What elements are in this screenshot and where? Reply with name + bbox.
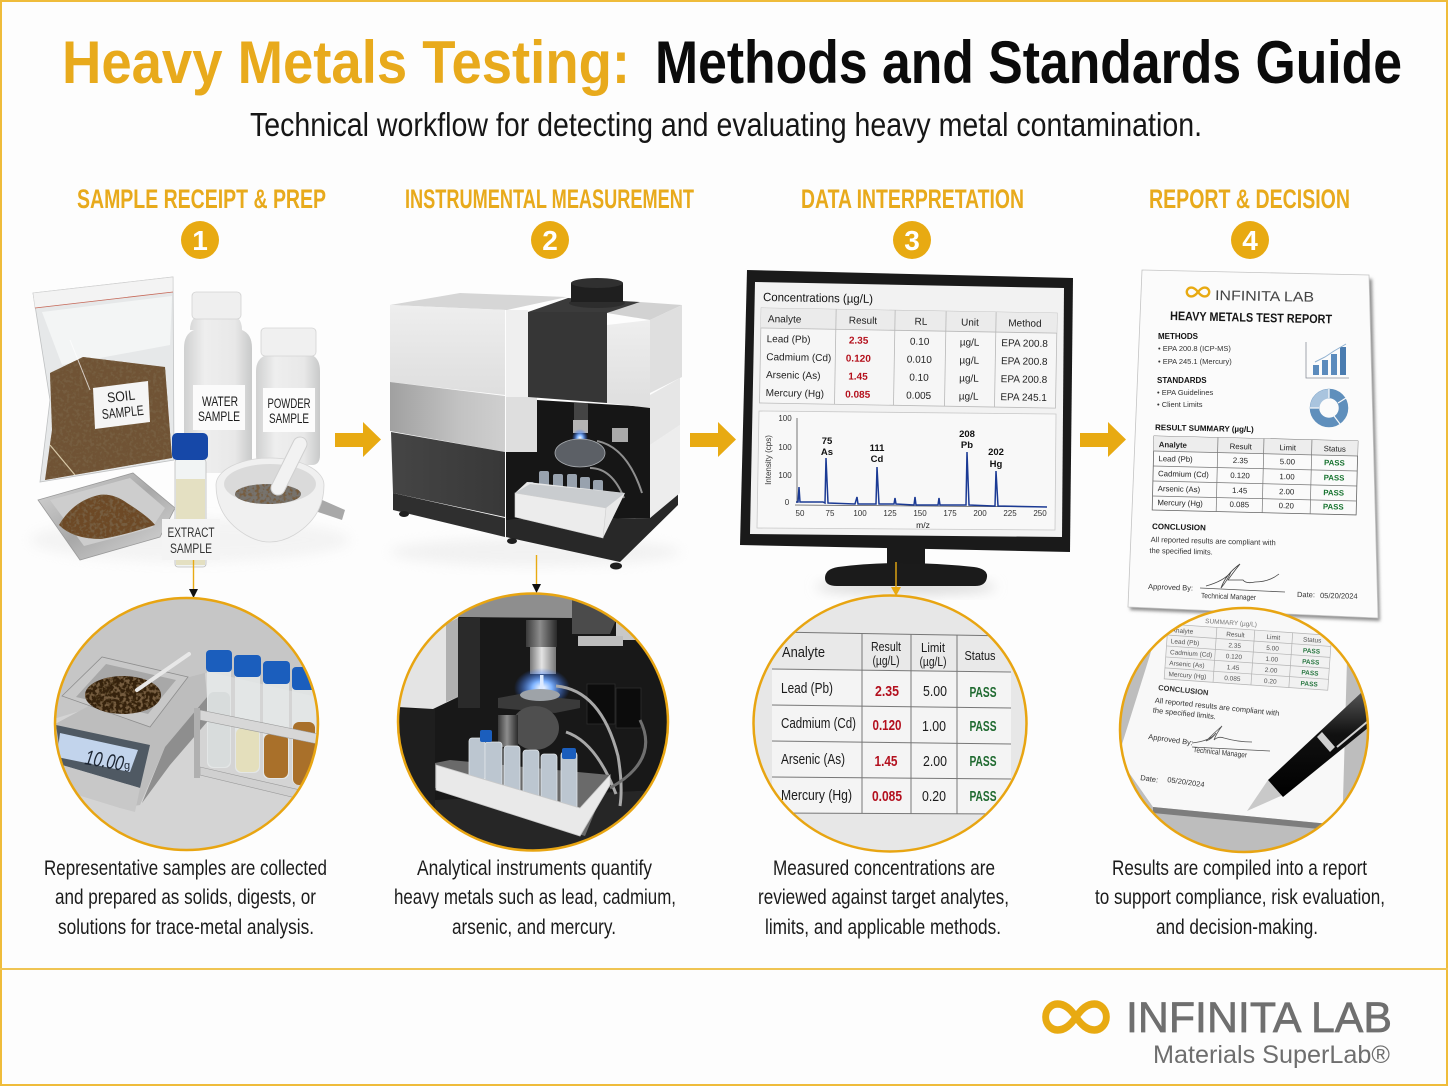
extract sample vial: SAMPLE: [170, 541, 212, 556]
powder sample bottle: SAMPLE: [269, 410, 309, 426]
soil sample bag: SOIL: [106, 387, 136, 405]
mass spectrum chart: Intensity (cps): [764, 435, 773, 485]
down arrow step 2: [532, 555, 541, 593]
methods and standards lists: [1157, 332, 1232, 409]
vial tray: [435, 730, 610, 836]
detail circle 3: limits table: 5.00: [923, 684, 947, 700]
zoomed signature: Technical Manager: [1193, 745, 1248, 760]
soil sample bag: [33, 277, 174, 482]
result summary heading: RESULT SUMMARY (µg/L): [1155, 423, 1254, 434]
concentrations table: EPA 245.1: [1000, 392, 1047, 404]
report signature block: Approved By:: [1148, 582, 1193, 593]
caption step 1: Representative samples are collected: [44, 857, 327, 880]
soil sample bag: SAMPLE: [101, 402, 144, 422]
mass spectrum chart: 225: [1003, 509, 1017, 518]
mortar and pestle: [216, 444, 345, 542]
caption step 2: [394, 857, 676, 939]
detail circle 3: limits table: 0.120: [872, 718, 902, 734]
mass spectrum chart: [757, 411, 1056, 530]
detail circle 3: limits table: 2.00: [923, 754, 947, 770]
zoomed table: Analyte: [1171, 627, 1194, 636]
concentrations table: Result: [849, 315, 877, 327]
caption step 1: solutions for trace-metal analysis.: [58, 916, 314, 939]
mass spectrum chart: 175: [943, 509, 957, 518]
mass spectrum chart: 208: [959, 429, 975, 440]
caption step 3: [758, 857, 1009, 939]
mass spectrum chart: As: [821, 447, 833, 458]
mass spectrum chart: 100: [778, 414, 792, 423]
zoomed table: Mercury (Hg): [1168, 671, 1207, 681]
detail circle 3: limits table: 0.085: [872, 789, 902, 805]
zoomed table: PASS: [1303, 647, 1321, 656]
report results table: 0.120: [1230, 471, 1251, 480]
report results table: Mercury (Hg): [1157, 498, 1203, 508]
zoomed table: Limit: [1266, 634, 1281, 642]
water sample bottle: SAMPLE: [198, 408, 240, 424]
zoomed signature: 05/20/2024: [1167, 775, 1205, 789]
report bar chart: [1306, 342, 1349, 378]
mass spectrum chart: 250: [1033, 509, 1047, 518]
zoomed summary heading: SUMMARY (µg/L): [1205, 618, 1257, 629]
report results table: 0.20: [1279, 501, 1295, 510]
water sample bottle: WATER: [202, 393, 238, 409]
report results table: Cadmium (Cd): [1158, 469, 1209, 479]
report donut chart: [1310, 389, 1346, 424]
mass spectrum chart: 100: [778, 471, 792, 480]
step badge 4: 4: [1242, 225, 1258, 256]
detail circle 3: limits table: PASS: [970, 719, 997, 735]
mass spectrum chart: Hg: [990, 459, 1003, 470]
report results table: Status: [1324, 444, 1346, 454]
mass spectrum chart: 0: [785, 498, 790, 507]
concentrations table: Mercury (Hg): [766, 388, 824, 400]
detail circle 3: limits table: PASS: [970, 789, 997, 805]
subtitle: Technical workflow for detecting and evaluating heavy metal contamination.: [250, 106, 1202, 143]
detail circle 3: limits table: Analyte: [782, 645, 825, 661]
report results table: Arsenic (As): [1158, 484, 1201, 494]
monitor stand: [816, 546, 996, 595]
concentrations table: 2.35: [849, 336, 869, 347]
report results table: 2.35: [1233, 456, 1249, 465]
concentrations table: EPA 200.8: [1001, 338, 1048, 350]
step badge 1: 1: [192, 225, 208, 256]
concentrations table: [760, 308, 1057, 408]
report results table: PASS: [1323, 502, 1344, 512]
detail circle 3: limits table: 1.00: [922, 719, 946, 735]
concentrations table: µg/L: [959, 391, 979, 403]
detail circle 3: limits table: [750, 590, 1030, 855]
illustration: ICP-MS instrument: [390, 278, 682, 570]
step badge 3: 3: [904, 225, 920, 256]
zoomed table: 1.45: [1227, 664, 1240, 672]
mass spectrum chart: 75: [822, 436, 833, 447]
concentrations table: 0.085: [845, 389, 871, 401]
report results table: Limit: [1279, 443, 1297, 452]
report results table: PASS: [1324, 473, 1344, 483]
detail circle 2: plasma torch and autosampler: [395, 590, 675, 855]
balance: g: [124, 760, 130, 772]
mass spectrum chart: m/z: [916, 520, 930, 530]
zoomed conclusion: the specified limits.: [1152, 706, 1216, 721]
zoomed table: PASS: [1302, 658, 1320, 667]
concentrations table: µg/L: [959, 355, 980, 367]
caption step 2: arsenic, and mercury.: [452, 916, 616, 939]
mass spectrum chart: 100: [778, 443, 792, 452]
step 3 heading: DATA INTERPRETATION: [801, 184, 1024, 214]
concentrations table: Analyte: [768, 314, 802, 326]
tagline: Materials SuperLab®: [1153, 1041, 1391, 1069]
step 2 heading: INSTRUMENTAL MEASUREMENT: [405, 184, 694, 214]
detail circle 3: limits table: Arsenic (As): [781, 752, 845, 768]
report results table: 2.00: [1279, 487, 1295, 496]
methods and standards lists: METHODS: [1158, 332, 1199, 341]
zoomed table: 5.00: [1266, 645, 1279, 653]
report results table: 5.00: [1280, 457, 1296, 466]
icon: infinity mark: [1046, 1004, 1106, 1030]
zoomed signature: Approved By:: [1148, 732, 1194, 747]
illustration: sample containers: [30, 277, 350, 567]
caption step 4: to support compliance, risk evaluation,: [1095, 886, 1385, 909]
detail circle 3: limits table: 2.35: [875, 684, 899, 700]
methods and standards lists: • Client Limits: [1157, 400, 1203, 409]
report conclusion: the specified limits.: [1149, 546, 1213, 557]
concentrations table: 1.45: [848, 371, 868, 383]
detail circle 3: limits table: (µg/L): [872, 654, 900, 668]
zoomed table: 0.20: [1264, 678, 1277, 686]
report results table: Analyte: [1159, 440, 1188, 450]
caption step 1: and prepared as solids, digests, or: [55, 886, 316, 909]
report signature block: Technical Manager: [1201, 591, 1257, 602]
tray of soil with spoon: [62, 654, 189, 727]
caption step 1: [44, 857, 327, 939]
step badge 2: 2: [542, 225, 558, 256]
mass spectrum chart: 200: [973, 509, 987, 518]
zoomed table: 2.35: [1228, 642, 1242, 650]
detail circle 3: limits table: PASS: [970, 754, 997, 770]
zoomed table: Result: [1226, 631, 1245, 639]
drain block: [587, 684, 641, 728]
report logo: [1187, 287, 1314, 305]
report results table: 1.45: [1232, 486, 1248, 495]
detail circle 3: limits table: Status: [964, 649, 996, 663]
zoomed table: 0.085: [1224, 675, 1241, 683]
footer logo: Infinita Lab: [1046, 994, 1392, 1069]
mass spectrum chart: 150: [913, 509, 927, 518]
concentrations table: Unit: [961, 317, 979, 329]
detail circle 3: limits table: Result: [871, 640, 901, 654]
zoomed conclusion: All reported results are compliant with: [1154, 696, 1280, 718]
zoomed table: [1164, 624, 1332, 690]
concentrations table: µg/L: [960, 337, 980, 349]
zoomed table: 1.00: [1265, 656, 1279, 664]
illustration: monitor with results: [740, 270, 1073, 595]
mass spectrum chart: 202: [988, 447, 1004, 458]
caption step 4: [1095, 857, 1385, 939]
flow arrow 2 to 3: [690, 422, 736, 457]
caption step 3: Measured concentrations are: [773, 857, 995, 880]
caption step 4: and decision-making.: [1156, 916, 1318, 939]
detail circle 3: limits table: Lead (Pb): [781, 681, 833, 697]
concentrations table: EPA 200.8: [1001, 356, 1048, 368]
detail circle 3: limits table: Mercury (Hg): [781, 788, 852, 804]
powder sample bottle: [256, 328, 320, 465]
concentrations table: 0.005: [906, 391, 932, 402]
mass spectrum chart: 100: [853, 509, 867, 518]
down arrow step 1: [189, 560, 198, 598]
caption step 2: Analytical instruments quantify: [417, 857, 652, 880]
report conclusion: CONCLUSION: [1152, 522, 1206, 532]
concentrations table: Cadmium (Cd): [766, 352, 831, 364]
zoomed signature: [1140, 726, 1270, 789]
wordmark: INFINITA LAB: [1126, 994, 1392, 1042]
mass spectrum chart: Cd: [871, 454, 884, 465]
detail circle 4: signed report with pen: [1118, 606, 1370, 854]
zoomed table: Status: [1303, 636, 1322, 645]
concentrations table: Method: [1008, 318, 1042, 330]
methods and standards lists: • EPA 245.1 (Mercury): [1158, 357, 1232, 366]
extract sample vial: [162, 433, 220, 567]
zoomed table: 2.00: [1264, 667, 1278, 675]
powder sample bottle: POWDER: [268, 395, 310, 411]
report title: HEAVY METALS TEST REPORT: [1170, 309, 1333, 326]
report results table: Lead (Pb): [1158, 454, 1193, 464]
report conclusion: All reported results are compliant with: [1151, 535, 1276, 547]
illustration: test report document: [1128, 270, 1380, 621]
report signature block: Date:: [1297, 590, 1315, 599]
step 1 heading: SAMPLE RECEIPT & PREP: [77, 184, 326, 214]
concentrations table: RL: [914, 317, 928, 328]
zoomed table: Cadmium (Cd): [1170, 649, 1212, 659]
detail circle 3: limits table: PASS: [970, 685, 997, 701]
mass spectrum chart: Pb: [961, 440, 973, 451]
caption step 3: reviewed against target analytes,: [758, 886, 1009, 909]
balance: [55, 673, 207, 812]
step badge 2: [531, 221, 569, 259]
down arrow step 3: [891, 562, 901, 596]
report results table: PASS: [1323, 488, 1344, 498]
report results table: [1152, 436, 1358, 515]
zoomed table: PASS: [1300, 680, 1319, 689]
zoomed conclusion: CONCLUSION: [1158, 683, 1209, 697]
title: Heavy Metals Testing:: [62, 29, 630, 96]
stainless tray with soil: [38, 473, 175, 560]
extract sample vial: EXTRACT: [168, 525, 214, 540]
caption step 2: heavy metals such as lead, cadmium,: [394, 886, 676, 909]
test tube rack: [194, 650, 318, 798]
report results table: 1.00: [1279, 472, 1295, 481]
zoomed signature: Date:: [1140, 773, 1159, 784]
mass spectrum chart: 111: [870, 443, 885, 454]
step 4 heading: REPORT & DECISION: [1149, 184, 1350, 214]
step badge 4: [1231, 221, 1269, 259]
concentrations table: Lead (Pb): [767, 334, 811, 346]
caption step 4: Results are compiled into a report: [1112, 857, 1367, 880]
caption step 3: limits, and applicable methods.: [765, 916, 1001, 939]
balance: 10.00: [83, 746, 126, 776]
report results table: 0.085: [1229, 500, 1250, 509]
detail circle 3: limits table: 0.20: [922, 789, 946, 805]
zoomed table: Lead (Pb): [1171, 638, 1199, 647]
detail circle 3: limits table: (µg/L): [920, 655, 946, 669]
concentrations table: µg/L: [959, 373, 979, 385]
concentrations table: 0.10: [910, 337, 930, 348]
detail circle 3: limits table: Limit: [921, 641, 945, 655]
detail circle 1: weighing and digests: [50, 595, 330, 855]
zoomed table: PASS: [1301, 669, 1319, 678]
water sample bottle: [184, 292, 252, 473]
step badge 3: [893, 221, 931, 259]
mass spectrum chart: 75: [826, 509, 835, 518]
flow arrow 3 to 4: [1080, 422, 1126, 457]
concentrations table: Arsenic (As): [766, 370, 821, 382]
title: [62, 29, 1402, 96]
concentrations table: 0.010: [907, 355, 932, 366]
concentrations table: 0.10: [909, 373, 929, 384]
torch: [498, 620, 580, 750]
detail circle 3: limits table: 1.45: [874, 754, 898, 770]
report signature block: [1148, 564, 1358, 602]
concentrations table: 0.120: [846, 353, 871, 365]
flow arrow 1 to 2: [335, 422, 381, 457]
detail circle 3: limits table: Cadmium (Cd): [781, 716, 856, 732]
report logo: INFINITA LAB: [1215, 287, 1314, 305]
report results table: PASS: [1324, 458, 1345, 468]
methods and standards lists: • EPA 200.8 (ICP-MS): [1158, 344, 1231, 353]
methods and standards lists: • EPA Guidelines: [1157, 388, 1214, 397]
step badge 1: [181, 221, 219, 259]
zoomed table: 0.120: [1225, 653, 1243, 661]
methods and standards lists: STANDARDS: [1157, 376, 1207, 385]
zoomed conclusion: [1153, 685, 1279, 720]
fountain pen: [1247, 693, 1367, 811]
mass spectrum chart: 125: [883, 509, 897, 518]
report results table: Result: [1230, 442, 1253, 451]
concentrations table: EPA 200.8: [1001, 374, 1048, 386]
mass spectrum chart: 50: [796, 509, 805, 518]
report conclusion: [1149, 522, 1276, 558]
screen heading: Concentrations (µg/L): [763, 290, 873, 306]
report signature block: 05/20/2024: [1320, 591, 1358, 601]
tubing: [556, 686, 646, 806]
zoomed table: Arsenic (As): [1169, 660, 1205, 670]
